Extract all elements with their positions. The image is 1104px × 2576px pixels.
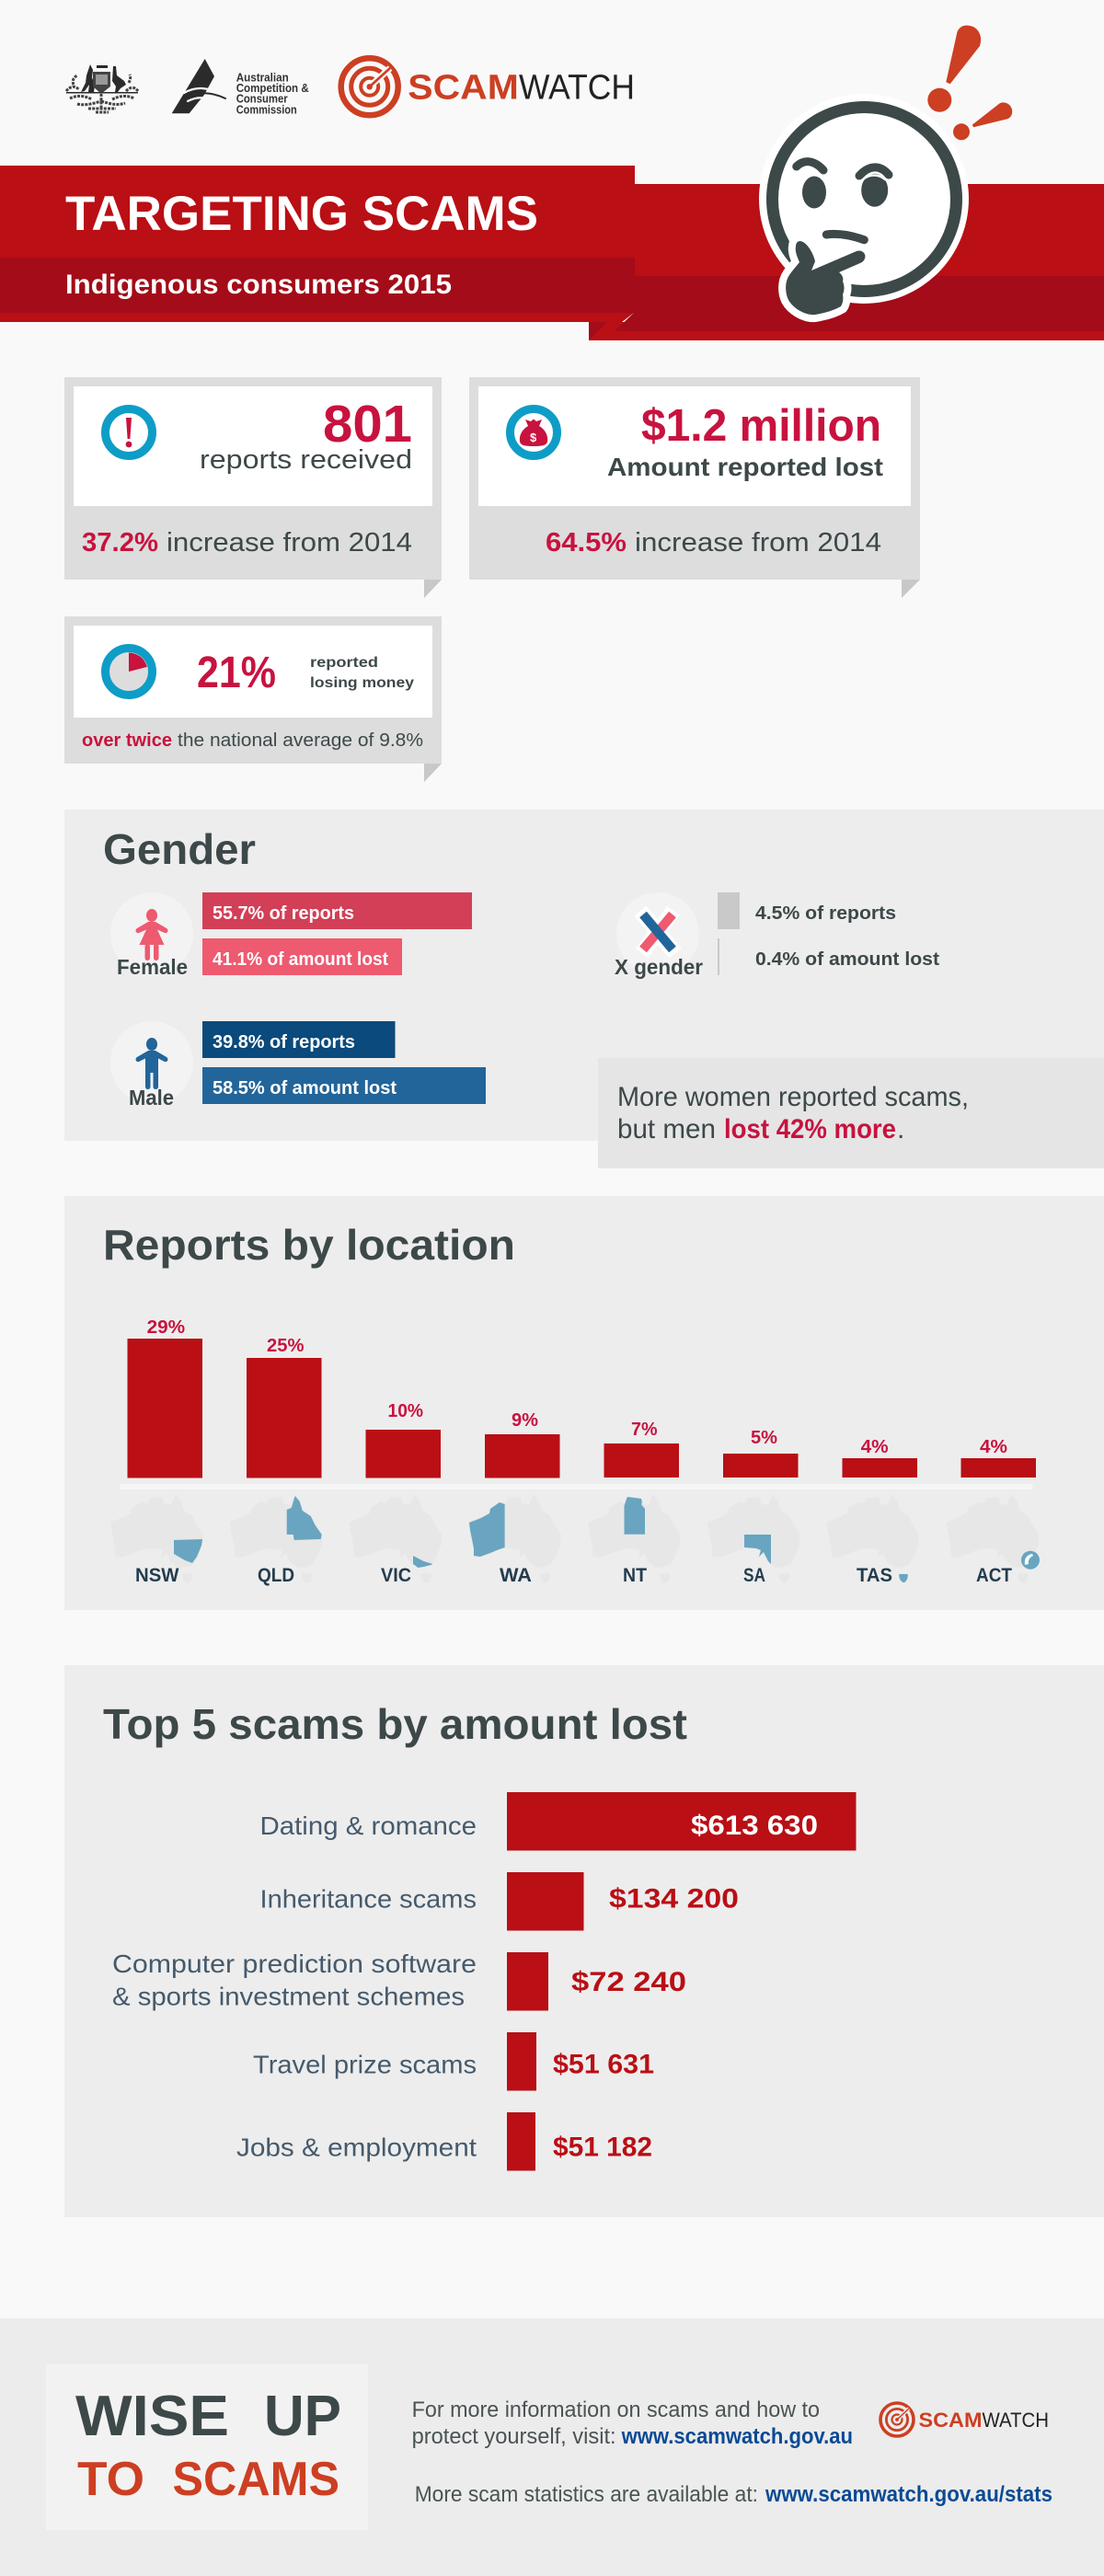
text: more statistics: www.scamwatch.gov.au/stats — [765, 2482, 1052, 2507]
row: computer prediction software: $72 240 — [571, 1967, 686, 1997]
row: dating and romance — [259, 1792, 856, 1851]
map: NSW: NSW — [135, 1565, 179, 1586]
logo: footer Scamwatch: SCAM — [918, 2409, 983, 2432]
bar: male amount lost: 58.5% of amount lost — [213, 1078, 397, 1098]
row: travel prize scams — [253, 2032, 654, 2090]
row: dating and romance: $613 630 — [691, 1811, 818, 1841]
text: over twice national average — [82, 730, 423, 751]
icon: exclamation — [105, 408, 153, 456]
row: jobs and employment: $51 182 — [553, 2133, 652, 2163]
label: reports received: reports received — [200, 445, 412, 475]
map: VIC — [350, 1496, 442, 1586]
row: travel prize scams: Travel prize scams — [253, 2050, 477, 2079]
row: computer prediction software: & sports investment schemes — [112, 1983, 465, 2011]
bar: male reports — [202, 1021, 396, 1058]
text: increase — [82, 528, 412, 558]
callout: women reported, men lost more: but men — [617, 1114, 716, 1144]
heading: reports by location: Reports by location — [103, 1221, 515, 1269]
map: SA — [708, 1496, 799, 1586]
group: X gender: X gender — [615, 955, 703, 979]
box: wise up to scams: TO — [77, 2453, 144, 2506]
bar: male reports: 39.8% of reports — [213, 1032, 355, 1052]
panel: top 5 scams — [64, 1665, 1104, 2217]
row: jobs and employment: Jobs & employment — [236, 2133, 477, 2162]
icon: exclamation marks — [927, 26, 1012, 140]
bar chart: locations: 4% — [980, 1437, 1007, 1457]
text: over twice national average: the national average of 9.8% — [178, 730, 423, 751]
text: more information: protect yourself, visit: — [412, 2424, 616, 2449]
text: increase: increase from 2014 — [635, 528, 881, 558]
icon: thinking face with exclamation marks — [759, 26, 1012, 315]
bar: female amount lost — [202, 938, 402, 975]
label: reported losing money: losing money — [310, 675, 414, 691]
map: VIC: VIC — [381, 1565, 411, 1586]
logo: ACCC: Consumer — [236, 92, 288, 106]
panel: reports received — [64, 377, 442, 598]
panel: gender — [64, 810, 1104, 1141]
bar: female amount lost: 41.1% of amount lost — [213, 949, 388, 970]
map: WA: WA — [500, 1565, 532, 1586]
logo: Scamwatch — [341, 58, 635, 115]
logo: footer Scamwatch: WATCH — [983, 2409, 1049, 2432]
text: more information — [412, 2398, 853, 2449]
text: more statistics: More scam statistics are available at: — [415, 2482, 758, 2507]
stat: 801: 801 — [323, 395, 412, 454]
bar: female reports: 55.7% of reports — [213, 903, 354, 924]
logo: ACCC — [172, 59, 309, 116]
map: TAS — [828, 1496, 918, 1586]
panel: reports by location — [64, 1196, 1104, 1610]
map: SA: SA — [743, 1565, 765, 1586]
text: over twice national average: over twice — [82, 730, 172, 751]
map: TAS: TAS — [857, 1565, 892, 1586]
logo: ACCC: Competition & — [236, 81, 309, 95]
callout: women reported, men lost more: More women reported scams, — [617, 1082, 969, 1112]
panel: amount lost — [469, 377, 920, 598]
row: computer prediction software — [112, 1949, 686, 2011]
callout: women reported, men lost more — [598, 1058, 1104, 1168]
bar chart: locations — [120, 1317, 1036, 1489]
logo: ACCC: Australian — [236, 70, 289, 84]
bar chart: locations: 4% — [861, 1437, 889, 1457]
text: more information: For more information on scams and how to — [412, 2398, 820, 2422]
row: travel prize scams: $51 631 — [553, 2050, 654, 2079]
text: increase — [546, 528, 881, 558]
footer — [0, 2318, 1104, 2576]
heading: top 5 scams: Top 5 scams by amount lost — [103, 1700, 687, 1748]
icon: pie 21% — [105, 648, 153, 696]
bar: male amount lost — [202, 1067, 486, 1104]
bar chart: locations: 10% — [388, 1401, 423, 1421]
group: X gender — [615, 892, 939, 979]
stat: $1.2 million: $1.2 million — [641, 401, 881, 451]
row: inheritance scams: $134 200 — [609, 1884, 739, 1915]
box: wise up to scams: UP — [264, 2385, 341, 2448]
bar chart: locations: 9% — [512, 1410, 538, 1431]
map: WA — [469, 1496, 560, 1586]
icon: money bag — [510, 408, 558, 456]
text: increase: 37.2% — [82, 528, 158, 558]
map: NT — [589, 1496, 680, 1586]
icon: money bag: $ — [530, 431, 537, 444]
box: wise up to scams: SCAMS — [173, 2453, 339, 2506]
bar: X gender reports: 4.5% of reports — [755, 903, 896, 924]
box: wise up to scams — [46, 2364, 368, 2530]
logo: Scamwatch: WATCH — [519, 69, 635, 108]
label: reported losing money: reported — [310, 655, 378, 671]
bar chart: locations: 7% — [631, 1420, 658, 1440]
title: TARGETING SCAMS — [65, 187, 538, 241]
stat: 21%: 21% — [197, 649, 276, 697]
callout: women reported, men lost more: lost 42% more — [724, 1114, 896, 1144]
logo: footer Scamwatch — [880, 2403, 1049, 2436]
logo: Scamwatch: SCAM — [408, 69, 519, 108]
text: more information: www.scamwatch.gov.au — [621, 2424, 853, 2449]
text: increase: increase from 2014 — [167, 528, 412, 558]
label: amount reported lost: Amount reported lost — [607, 453, 883, 481]
heading: gender: Gender — [103, 825, 256, 873]
map: QLD: QLD — [258, 1565, 294, 1586]
text: more statistics — [415, 2482, 1052, 2507]
bar chart: locations: 29% — [147, 1317, 185, 1338]
row: inheritance scams — [259, 1872, 739, 1930]
bar: X gender reports — [718, 892, 896, 929]
group: male — [110, 1021, 486, 1110]
callout: women reported, men lost more: . — [897, 1114, 904, 1144]
group: male: Male — [129, 1086, 174, 1110]
group: female: Female — [117, 955, 188, 979]
group: female — [110, 892, 472, 979]
logo: Australian coat of arms — [66, 64, 138, 112]
logo: ACCC: Commission — [236, 102, 297, 116]
bar chart: locations: 5% — [751, 1428, 777, 1448]
subtitle: Indigenous consumers 2015 — [65, 270, 452, 300]
row: computer prediction software: Computer prediction software — [112, 1949, 477, 1978]
row: dating and romance: Dating & romance — [259, 1811, 477, 1840]
bar chart: locations: 25% — [267, 1336, 305, 1356]
bar: X gender amount lost: 0.4% of amount lost — [755, 949, 939, 970]
row: inheritance scams: Inheritance scams — [259, 1885, 477, 1914]
map: QLD — [231, 1496, 322, 1586]
box: wise up to scams: WISE — [75, 2385, 229, 2448]
label: reported losing money — [310, 655, 414, 691]
map: NSW — [111, 1496, 202, 1586]
header banner — [0, 166, 1104, 340]
text: increase: 64.5% — [546, 528, 627, 558]
row: jobs and employment — [236, 2112, 652, 2171]
bar: female reports — [202, 892, 472, 929]
panel: reported losing money — [64, 616, 442, 782]
map: ACT: ACT — [976, 1565, 1012, 1586]
map: NT: NT — [623, 1565, 647, 1586]
map: ACT — [948, 1496, 1040, 1586]
